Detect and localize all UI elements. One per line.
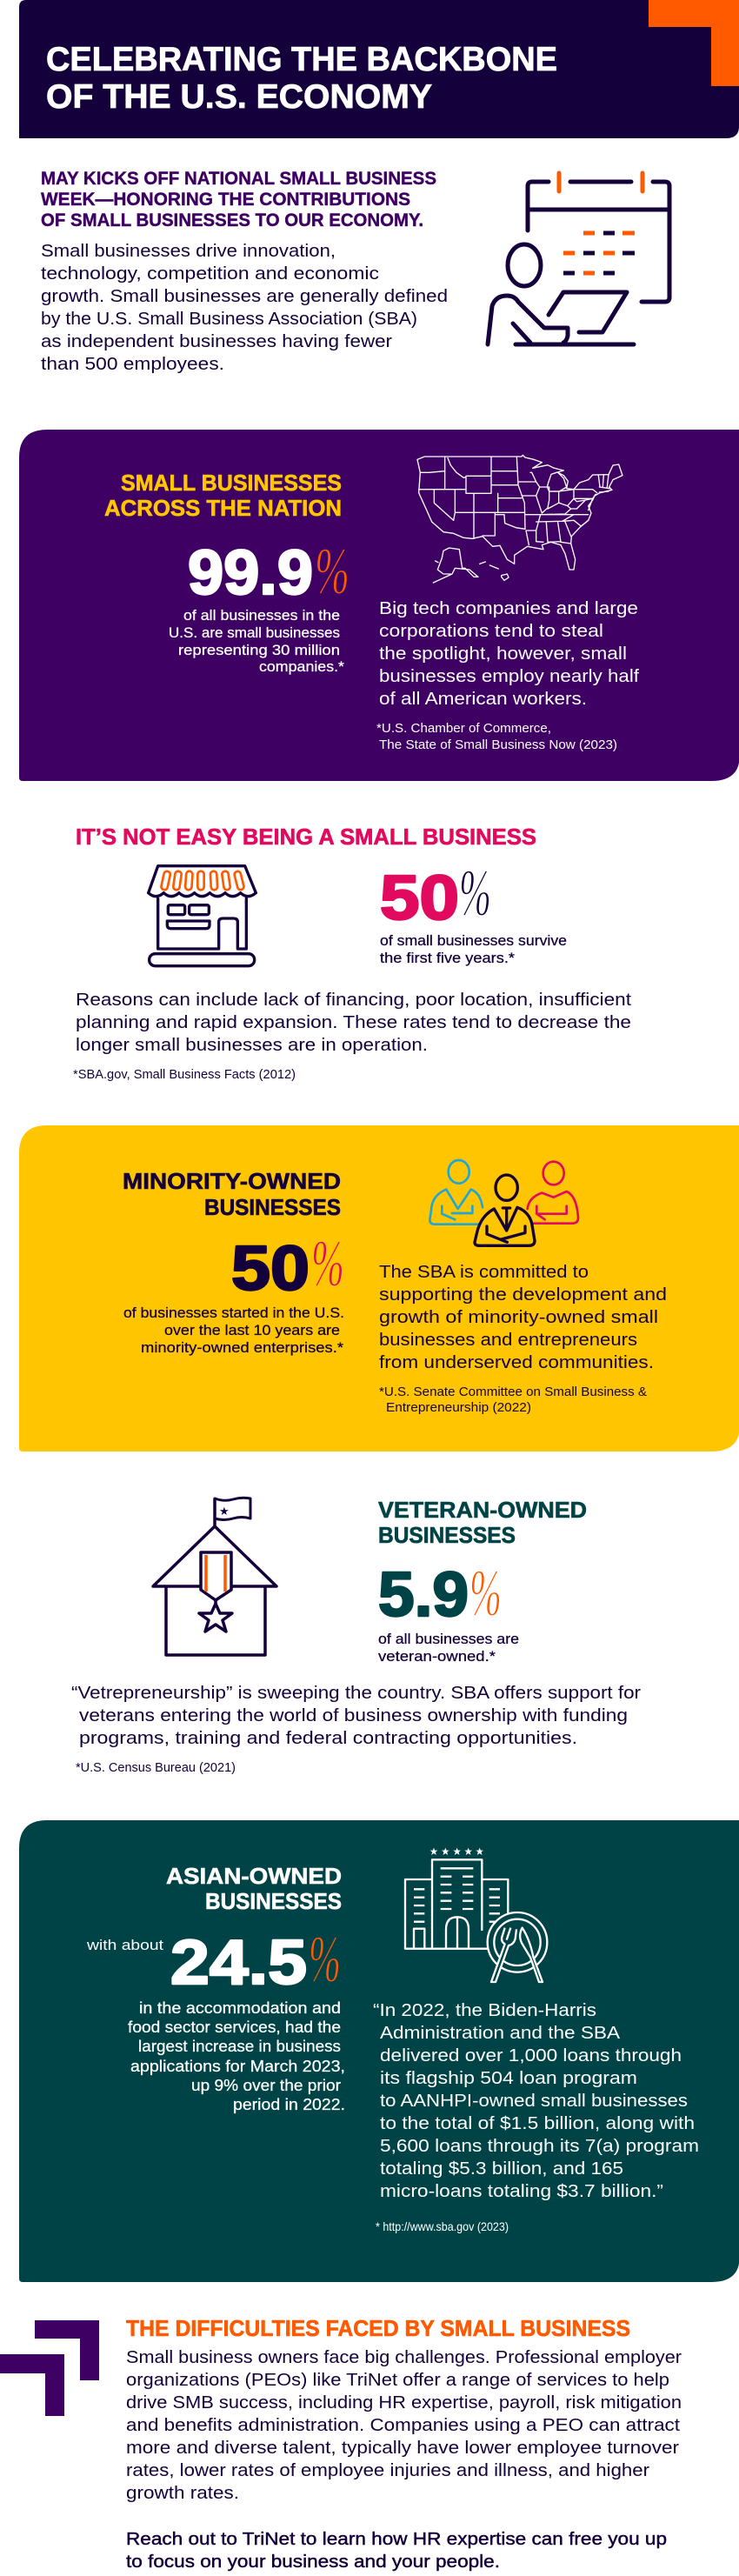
paragraph: and benefits administration. Companies using a PEO can attract (126, 2415, 680, 2435)
intro paragraph: technology, competition and economic (41, 264, 379, 284)
paragraph: businesses employ nearly half (379, 666, 639, 686)
panel: small businesses across the nation (19, 430, 739, 781)
title: OF THE U.S. ECONOMY (46, 78, 432, 116)
paragraph: to AANHPI-owned small businesses (380, 2091, 688, 2111)
stat description: representing 30 million (178, 643, 340, 658)
stat description: over the last 10 years are (164, 1323, 340, 1338)
intro heading: MAY KICKS OFF NATIONAL SMALL BUSINESS (41, 169, 436, 189)
intro heading: OF SMALL BUSINESSES TO OUR ECONOMY. (41, 210, 423, 230)
paragraph: more and diverse talent, typically have lower employee turnover (126, 2438, 679, 2458)
paragraph: totaling $5.3 billion, and 165 (380, 2159, 623, 2179)
paragraph: from underserved communities. (379, 1352, 654, 1372)
intro paragraph (41, 241, 448, 374)
paragraph: its flagship 504 loan program (380, 2068, 637, 2088)
paragraph (379, 1262, 667, 1372)
stat: 50 percent: 50 (231, 1234, 310, 1304)
paragraph: programs, training and federal contracting opportunities. (79, 1728, 577, 1748)
stat description: companies.* (259, 659, 345, 675)
stat description: of all businesses in the (183, 608, 340, 624)
section: veteran-owned businesses (71, 1498, 641, 1775)
intro paragraph: as independent businesses having fewer (41, 331, 392, 351)
intro paragraph: than 500 employees. (41, 354, 224, 374)
icon: person at laptop with calendar (488, 173, 669, 344)
icon: hotel with plate and cutlery (405, 1848, 547, 1982)
paragraph: The SBA is committed to (379, 1262, 589, 1282)
panel: asian-owned businesses (19, 1820, 739, 2282)
footnote: *SBA.gov, Small Business Facts (2012) (73, 1067, 296, 1082)
paragraph: planning and rapid expansion. These rates tend to decrease the (76, 1012, 631, 1032)
panel: minority-owned businesses (19, 1125, 739, 1452)
footnote (379, 1385, 647, 1415)
paragraph: micro-loans totaling $3.7 billion.” (380, 2181, 663, 2201)
paragraph (76, 990, 631, 1055)
stat: 5.9 percent (378, 1557, 502, 1630)
paragraph: Reasons can include lack of financing, poor location, insufficient (76, 990, 631, 1010)
footnote (376, 721, 617, 752)
stat: 5.9 percent: 5.9 (378, 1560, 469, 1630)
stat: 99.9 percent: 99.9 (188, 538, 313, 608)
footnote: The State of Small Business Now (2023) (379, 737, 617, 752)
stat description: food sector services, had the (128, 2019, 341, 2036)
intro paragraph: by the U.S. Small Business Association (SBA) (41, 309, 417, 329)
intro paragraph: growth. Small businesses are generally defined (41, 286, 448, 306)
paragraph: the spotlight, however, small (379, 644, 627, 664)
stat description: up 9% over the prior (191, 2077, 341, 2094)
paragraph (379, 598, 639, 709)
stat: 50 percent (380, 857, 491, 933)
icon: house with medal and flag (153, 1498, 276, 1655)
call to action: Reach out to TriNet to learn how HR expertise can free you up (126, 2529, 667, 2549)
stat description (378, 1632, 519, 1665)
paragraph (71, 1683, 641, 1748)
paragraph: drive SMB success, including HR expertise, payroll, risk mitigation (126, 2392, 682, 2412)
heading: BUSINESSES (205, 1890, 342, 1914)
stat description (380, 933, 567, 966)
stat: with about 24.5 percent: 24.5 (170, 1928, 307, 1998)
stat description (169, 608, 345, 675)
intro heading (41, 169, 436, 230)
paragraph: longer small businesses are in operation. (76, 1035, 428, 1055)
stat description: U.S. are small businesses (169, 625, 340, 641)
title (46, 41, 557, 116)
paragraph: “Vetrepreneurship” is sweeping the country. SBA offers support for (71, 1683, 641, 1703)
icon: storefront (149, 866, 256, 966)
paragraph: of all American workers. (379, 689, 587, 709)
call to action: to focus on your business and your people. (126, 2552, 500, 2572)
section: the difficulties faced by small business (0, 2317, 682, 2572)
paragraph: corporations tend to steal (379, 621, 603, 641)
footnote: *U.S. Senate Committee on Small Business & (379, 1385, 647, 1399)
paragraph: growth of minority-owned small (379, 1307, 658, 1327)
stat description: of businesses started in the U.S. (123, 1305, 344, 1321)
paragraph: organizations (PEOs) like TriNet offer a range of services to help (126, 2370, 669, 2390)
paragraph: “In 2022, the Biden-Harris (373, 2000, 596, 2020)
paragraph (126, 2347, 682, 2503)
footnote: * http://www.sba.gov (2023) (376, 2219, 509, 2233)
heading: IT’S NOT EASY BEING A SMALL BUSINESS (76, 825, 536, 850)
stat: with about 24.5 percent: % (309, 1923, 341, 1996)
paragraph: to the total of $1.5 billion, along with (380, 2113, 695, 2133)
heading: VETERAN-OWNED (378, 1498, 587, 1523)
paragraph: Small business owners face big challenges. Professional employer (126, 2347, 682, 2367)
paragraph: delivered over 1,000 loans through (380, 2045, 682, 2065)
stat: 50 percent: % (459, 857, 491, 930)
heading (378, 1498, 587, 1548)
paragraph: Big tech companies and large (379, 598, 638, 618)
footnote: Entrepreneurship (2022) (386, 1400, 531, 1415)
paragraph: supporting the development and (379, 1285, 667, 1305)
stat description: minority-owned enterprises.* (141, 1340, 344, 1356)
stat description: the first five years.* (380, 951, 516, 966)
paragraph: rates, lower rates of employee injuries and illness, and higher (126, 2460, 649, 2480)
stat description: applications for March 2023, (130, 2058, 345, 2075)
heading: SMALL BUSINESSES (121, 471, 342, 496)
paragraph (373, 2000, 699, 2201)
footnote: *U.S. Census Bureau (2021) (76, 1760, 236, 1775)
intro heading: WEEK—HONORING THE CONTRIBUTIONS (41, 190, 410, 210)
stat description (128, 1999, 345, 2113)
stat: with about 24.5 percent: with about (86, 1938, 163, 1953)
icon: purple chevron brackets (0, 2320, 99, 2416)
stat description: of all businesses are (378, 1632, 519, 1647)
paragraph: Administration and the SBA (380, 2023, 620, 2043)
paragraph: growth rates. (126, 2483, 239, 2503)
stat: 5.9 percent: % (469, 1557, 502, 1630)
heading: MINORITY-OWNED (123, 1170, 341, 1194)
heading: THE DIFFICULTIES FACED BY SMALL BUSINESS (126, 2317, 630, 2341)
heading (166, 1865, 342, 1914)
stat description: of small businesses survive (380, 933, 567, 949)
stat description (123, 1305, 344, 1356)
icon: house with medal and flag: ★ (219, 1505, 230, 1518)
stat: with about 24.5 percent (86, 1923, 341, 1998)
stat description: period in 2022. (233, 2096, 345, 2113)
stat description: in the accommodation and (139, 1999, 341, 2017)
stat description: veteran-owned.* (378, 1649, 496, 1665)
footnote: *U.S. Chamber of Commerce, (376, 721, 551, 736)
stat description: largest increase in business (138, 2038, 341, 2055)
paragraph: veterans entering the world of business ownership with funding (79, 1705, 628, 1725)
icon: three business people (429, 1160, 578, 1245)
header banner (19, 0, 739, 138)
heading: BUSINESSES (204, 1196, 341, 1220)
heading: BUSINESSES (378, 1524, 516, 1548)
heading (123, 1170, 341, 1220)
intro paragraph: Small businesses drive innovation, (41, 241, 336, 261)
heading: ACROSS THE NATION (104, 497, 342, 521)
section: not easy being a small business (73, 825, 631, 1082)
icon: orange corner bracket (649, 0, 739, 86)
call to action (126, 2529, 667, 2572)
heading: ASIAN-OWNED (166, 1865, 342, 1889)
paragraph: 5,600 loans through its 7(a) program (380, 2136, 699, 2156)
stat: 99.9 percent: % (315, 535, 350, 608)
title: CELEBRATING THE BACKBONE (46, 41, 557, 78)
heading (104, 471, 342, 521)
stat: 50 percent (231, 1227, 344, 1304)
icon: U.S. map (417, 455, 622, 583)
stat: 50 percent: % (311, 1227, 344, 1300)
paragraph: businesses and entrepreneurs (379, 1330, 637, 1350)
stat: 50 percent: 50 (380, 864, 459, 933)
